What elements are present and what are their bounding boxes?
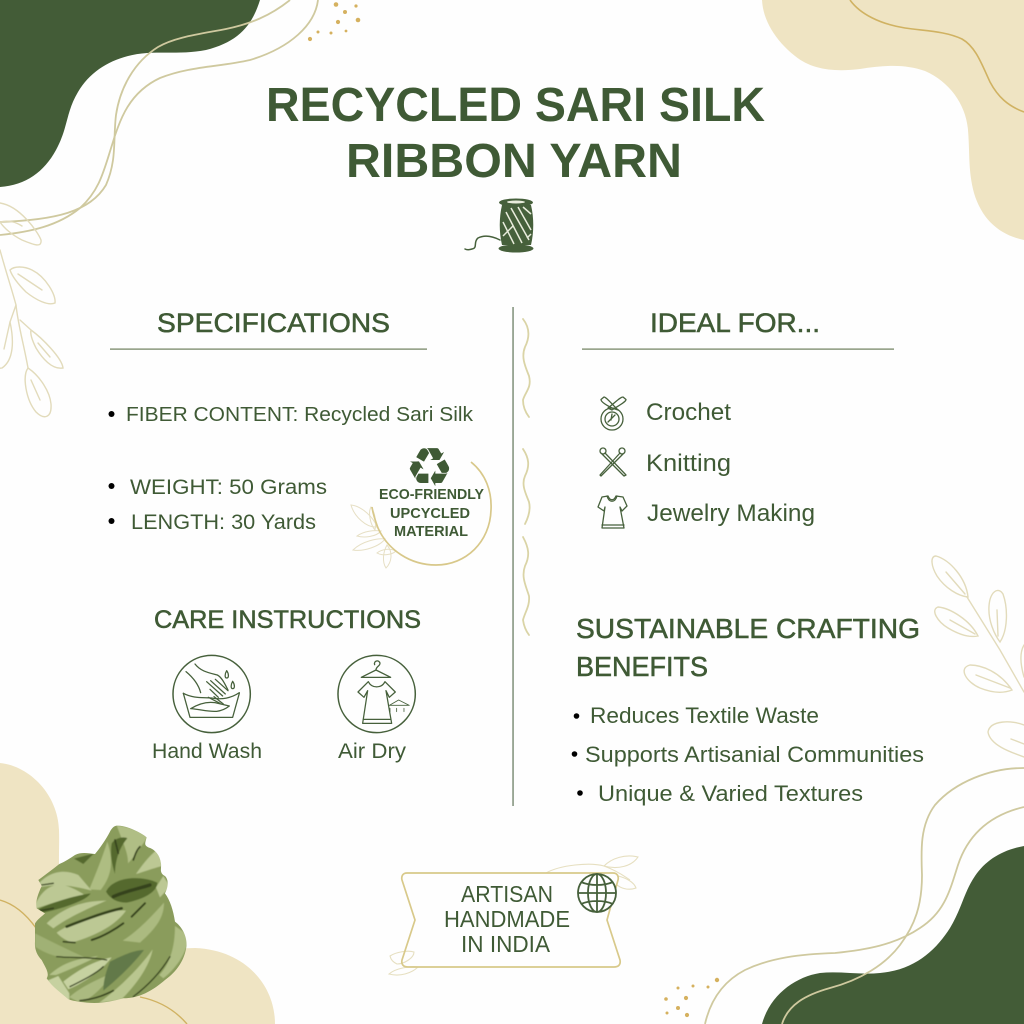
badge text: ECO-FRIENDLY — [379, 486, 484, 503]
panel: sustainable crafting benefits — [572, 613, 924, 806]
banner frame — [402, 873, 620, 967]
icon: air dry — [338, 655, 415, 733]
bottom-left beige blob — [0, 763, 275, 1024]
eco-friendly badge — [351, 436, 491, 568]
panel: ideal for — [582, 308, 894, 528]
yarn ball illustration — [34, 826, 187, 1003]
icon: globe — [578, 874, 616, 912]
center vertical divider — [512, 307, 514, 806]
badge text — [379, 486, 484, 540]
spec: fiber content: FIBER CONTENT: Recycled Sari Silk — [126, 403, 474, 426]
heading: sustainable crafting benefits — [576, 613, 920, 682]
banner text: HANDMADE — [444, 906, 570, 932]
bottom-left gold line — [0, 900, 187, 1024]
icon: recycle symbol: ♻ — [405, 436, 454, 499]
heading: care instructions: CARE INSTRUCTIONS — [154, 606, 421, 634]
badge text: MATERIAL — [394, 523, 468, 540]
spec: weight: WEIGHT: 50 Grams — [130, 475, 327, 499]
title: RECYCLED SARI SILK — [266, 79, 765, 132]
bottom-right gold dots — [664, 978, 719, 1017]
benefit: supports artisanial communities: Supports Artisanial Communities — [585, 742, 924, 767]
banner leaves — [389, 856, 638, 975]
benefit: reduces textile waste: Reduces Textile Waste — [590, 703, 819, 728]
banner text: IN INDIA — [461, 931, 550, 957]
bottom-right green blob — [762, 846, 1024, 1024]
heading: ideal for: IDEAL FOR... — [650, 308, 820, 338]
top-left green blob — [0, 0, 260, 187]
heading: sustainable crafting benefits: BENEFITS — [576, 651, 708, 682]
icon: knitting — [600, 448, 626, 476]
icon: crochet — [601, 397, 626, 430]
wavy ornaments — [523, 319, 530, 635]
bottom-right flowing lines — [705, 768, 1024, 1024]
badge ring — [372, 462, 491, 565]
badge text: UPCYCLED — [390, 505, 470, 522]
label: hand wash: Hand Wash — [152, 740, 262, 763]
top-left gold dots — [308, 2, 360, 41]
icon: shirt — [598, 496, 627, 528]
banner text: ARTISAN — [461, 881, 553, 907]
benefit: unique and varied textures: Unique & Varied Textures — [598, 781, 863, 806]
artisan handmade banner — [389, 856, 638, 975]
label: crochet: Crochet — [646, 399, 731, 426]
banner text — [444, 881, 570, 957]
icon: thread spool — [465, 198, 534, 252]
label: knitting: Knitting — [646, 450, 731, 477]
top-right beige blob — [762, 0, 1024, 240]
spec: length: LENGTH: 30 Yards — [131, 510, 316, 534]
title: RIBBON YARN — [346, 135, 682, 188]
badge leaves — [351, 505, 396, 568]
top-left flowing lines — [0, 0, 318, 235]
top-left leaf sprig — [0, 203, 63, 417]
title — [266, 79, 765, 188]
label: jewelry making: Jewelry Making — [647, 500, 815, 527]
panel: specifications — [108, 308, 474, 534]
panel: care instructions — [152, 606, 421, 763]
heading: sustainable crafting benefits: SUSTAINABLE CRAFTING — [576, 613, 920, 644]
top-right gold line — [850, 0, 1024, 112]
right leaf sprig — [932, 556, 1024, 757]
icon: hand wash — [173, 655, 250, 733]
label: air dry: Air Dry — [338, 740, 407, 763]
heading: specifications: SPECIFICATIONS — [157, 308, 390, 338]
